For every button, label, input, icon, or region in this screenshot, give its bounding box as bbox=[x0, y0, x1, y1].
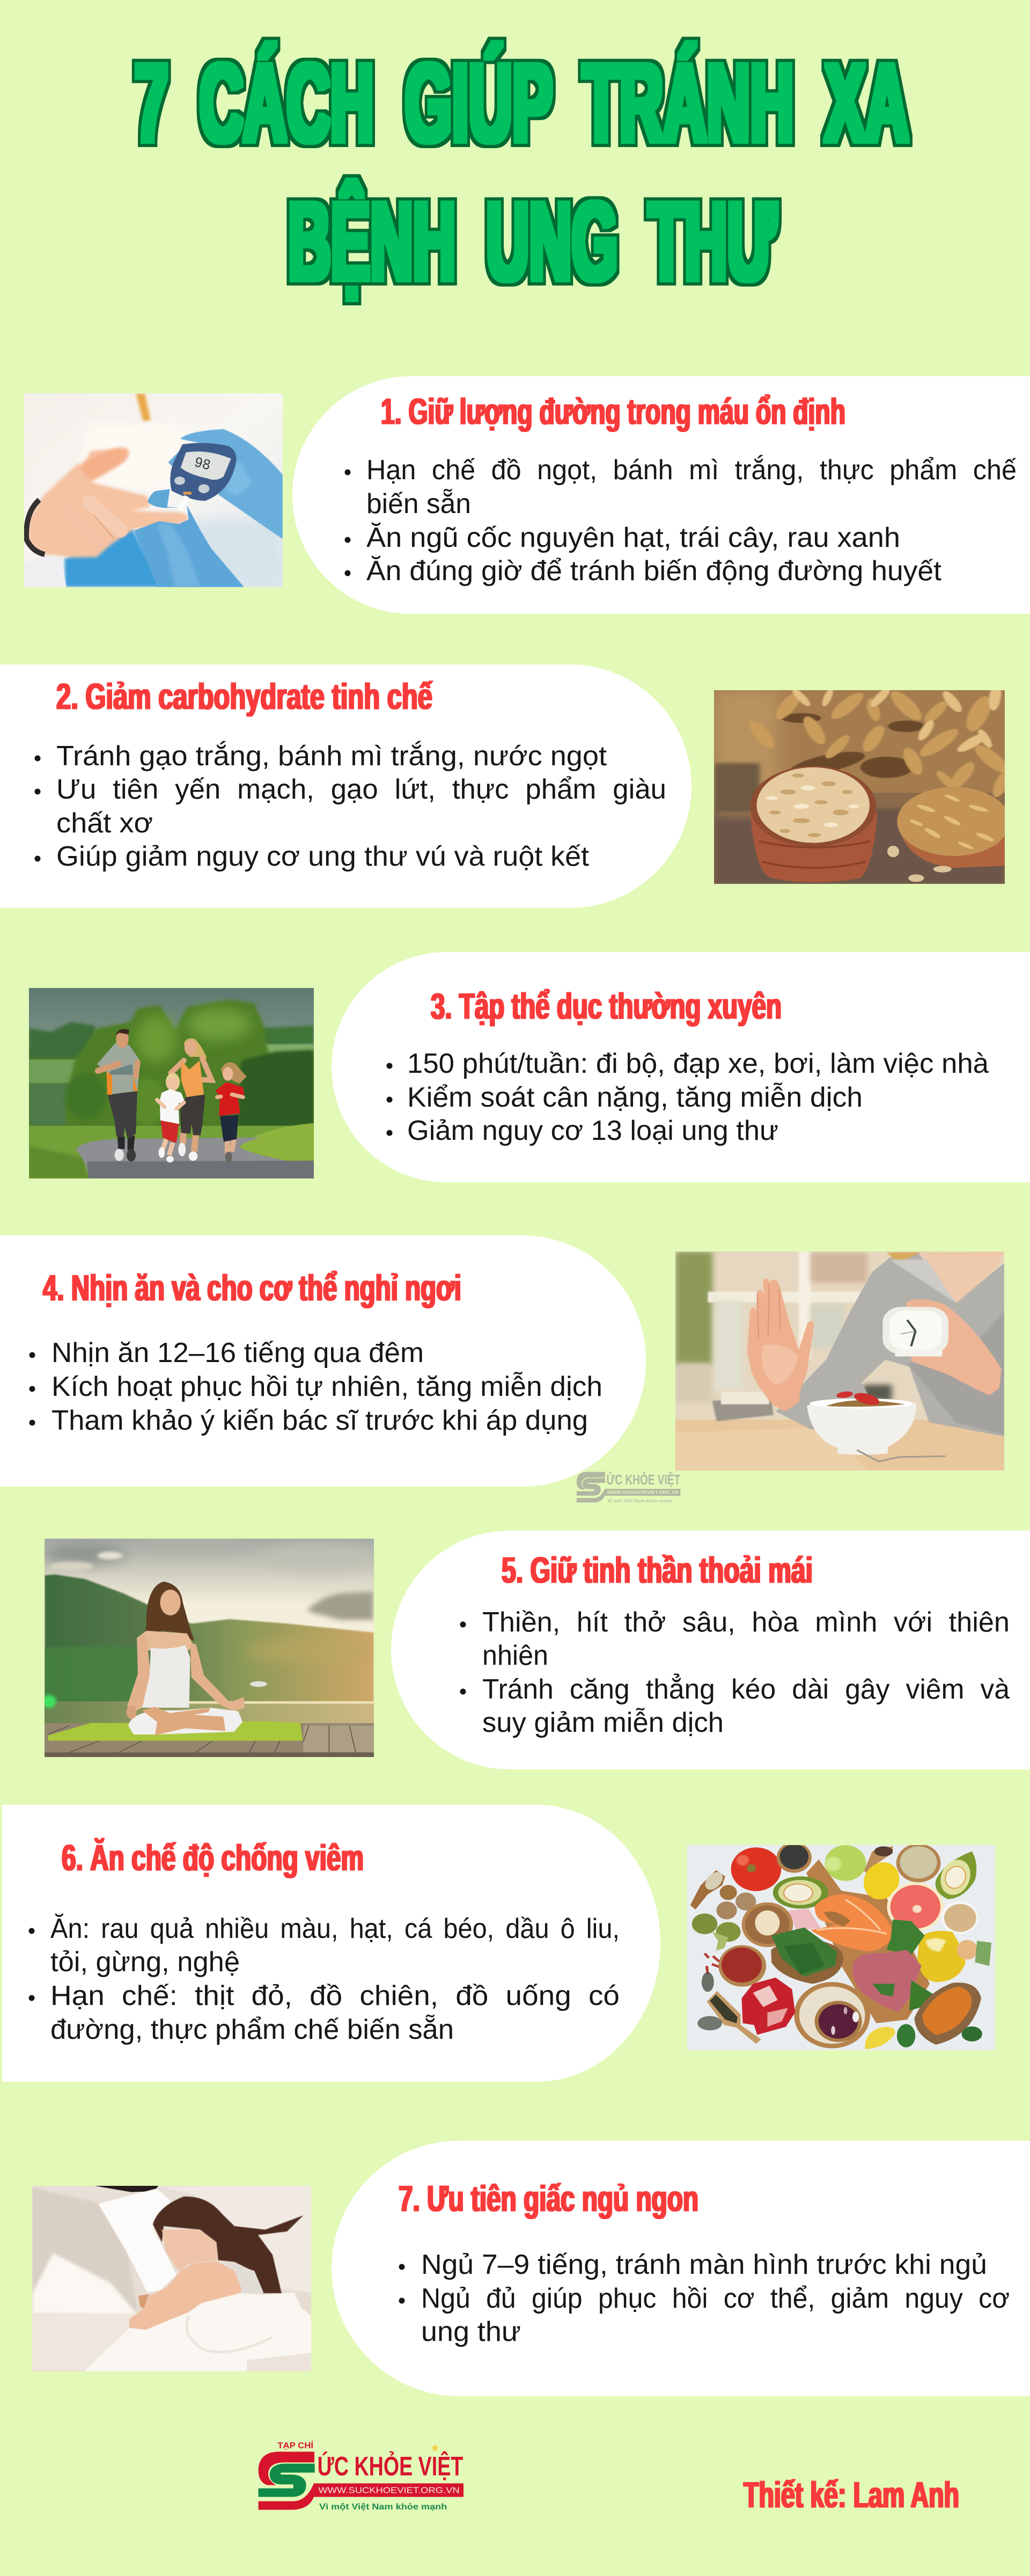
avocado center bbox=[773, 1876, 828, 1908]
card 3 bbox=[332, 952, 1030, 1182]
bullet list 4: Kích hoạt phục hồi tự nhiên, tăng miễn dịch bbox=[52, 1371, 602, 1402]
beef bbox=[852, 1950, 922, 2011]
oats bowl bbox=[794, 1982, 870, 2048]
bullet list 1: biến sẵn bbox=[366, 488, 471, 519]
bullet list 7: Ngủ 7–9 tiếng, tránh màn hình trước khi ngủ bbox=[421, 2249, 987, 2280]
raised hand bbox=[747, 1278, 814, 1411]
upper glove bbox=[180, 429, 283, 539]
card 5 bbox=[391, 1531, 1030, 1769]
watermark logo: WWW.SUCKHOEVIET.ORG.VN bbox=[607, 1490, 679, 1495]
walnuts bbox=[720, 1885, 737, 1900]
photo: healthy food flat lay bbox=[687, 1845, 995, 2050]
ham slice bbox=[789, 1908, 821, 1930]
bullet list 4: Nhịn ăn 12–16 tiếng qua đêm bbox=[52, 1337, 424, 1368]
bullet list 6: Ăn: rau quả nhiều màu, hạt, cá béo, dầu ô liu, bbox=[50, 1913, 620, 1944]
watermark logo bbox=[576, 1472, 680, 1503]
footer logo: Sức Khỏe Việt: TẠP CHÍ bbox=[277, 2441, 314, 2450]
photo: glucose meter: 98 bbox=[193, 455, 212, 474]
bullet list 2: Tránh gạo trắng, bánh mì trắng, nước ngọt bbox=[56, 741, 607, 772]
photo: woman meditating bbox=[45, 1539, 374, 1757]
heading 6: 6. Ăn chế độ chống viêm bbox=[62, 1838, 364, 1878]
bullet list 3: Giảm nguy cơ 13 loại ung thư bbox=[407, 1115, 778, 1146]
bullet list 5: suy giảm miễn dịch bbox=[482, 1707, 724, 1738]
bullet list 5 bbox=[460, 1607, 1010, 1738]
bullet list 5: nhiên bbox=[482, 1640, 548, 1671]
photo: glucose meter bbox=[24, 393, 283, 587]
sweater bbox=[776, 1253, 1004, 1437]
grapefruit bbox=[887, 1882, 944, 1931]
bullet list 7: ung thư bbox=[421, 2316, 521, 2347]
heading 3: 3. Tập thể dục thường xuyên bbox=[431, 986, 782, 1027]
heading 4: 4. Nhịn ăn và cho cơ thể nghỉ ngơi bbox=[43, 1268, 461, 1308]
lower glove bbox=[148, 489, 179, 508]
title bbox=[135, 41, 909, 303]
bullet list 1: Ăn đúng giờ để tránh biến động đường huyết bbox=[366, 555, 942, 587]
hand bbox=[28, 447, 188, 558]
section 4: fasting bbox=[0, 1235, 1004, 1503]
section 5: relaxed mind bbox=[42, 1531, 1030, 1769]
oil bottle bbox=[917, 1931, 966, 1982]
man bbox=[117, 1136, 135, 1150]
bullet list 6: tỏi, gừng, nghệ bbox=[50, 1946, 240, 1978]
bullet list 4: Tham khảo ý kiến bác sĩ trước khi áp dụng bbox=[52, 1405, 588, 1436]
lemon wedge and spinach bbox=[865, 2027, 895, 2049]
bullet list 6: đường, thực phẩm chế biến sẵn bbox=[50, 2014, 454, 2045]
card 4 bbox=[0, 1235, 646, 1487]
section 1: blood sugar bbox=[24, 376, 1030, 614]
bullet list 3: 150 phút/tuần: đi bộ, đạp xe, bơi, làm việc nhà bbox=[407, 1048, 989, 1079]
quinoa bowl bbox=[896, 1843, 940, 1882]
bullet list 2 bbox=[34, 741, 666, 872]
heading 5: 5. Giữ tinh thần thoải mái bbox=[502, 1550, 813, 1591]
broccoli bbox=[692, 1913, 717, 1934]
bullet list 6: Hạn chế: thịt đỏ, đồ chiên, đồ uống có bbox=[50, 1980, 620, 2011]
nuts bowl bbox=[742, 1902, 793, 1947]
bullet list 2: Ưu tiên yến mạch, gạo lứt, thực phẩm giàu bbox=[56, 774, 666, 805]
lentils bowl bbox=[914, 1982, 981, 2045]
woman bbox=[184, 1038, 207, 1059]
road bbox=[76, 1137, 314, 1179]
meter bbox=[170, 443, 237, 501]
bullet list 1: Hạn chế đồ ngọt, bánh mì trắng, thực phẩm chế bbox=[366, 455, 1017, 486]
card 6 bbox=[2, 1805, 660, 2082]
heading 2: 2. Giảm carbohydrate tinh chế bbox=[56, 676, 432, 717]
footer logo: Sức Khỏe Việt bbox=[259, 2441, 464, 2512]
woman bbox=[144, 1582, 195, 1647]
bullet list 3 bbox=[386, 1048, 989, 1146]
bullet list 1 bbox=[344, 455, 1017, 587]
photo: family jogging bbox=[29, 988, 314, 1179]
scoop top bbox=[864, 1846, 893, 1875]
lemon bbox=[859, 1859, 904, 1903]
chickpeas bbox=[940, 1901, 979, 1934]
tea scoop bbox=[707, 1991, 761, 2044]
photo: hand refusing food, clock bbox=[675, 1252, 1004, 1470]
bullet list 4 bbox=[29, 1337, 602, 1436]
spinach bowl bbox=[771, 1941, 843, 1984]
hand holding clock bbox=[906, 1299, 1002, 1395]
photo: oats in wooden bowls bbox=[714, 690, 1005, 884]
chia bowl bbox=[777, 1842, 812, 1873]
watermark logo: Vì một Việt Nam khỏe mạnh bbox=[607, 1498, 672, 1503]
card 1 bbox=[292, 376, 1030, 614]
heading 7: 7. Ưu tiên giấc ngủ ngon bbox=[399, 2178, 698, 2219]
clock bbox=[882, 1307, 948, 1355]
card 2 bbox=[0, 664, 691, 908]
bullet list 7: Ngủ đủ giúp phục hồi cơ thể, giảm nguy cơ bbox=[421, 2283, 1010, 2314]
section 2: refined carbs bbox=[0, 664, 1014, 908]
parsley bbox=[887, 1919, 925, 1955]
girl blonde bbox=[166, 1073, 180, 1091]
section 7: good sleep bbox=[32, 2141, 1030, 2396]
goji bowl bbox=[718, 1945, 766, 1987]
pomegranate bbox=[742, 1978, 795, 2035]
bullet list 6 bbox=[29, 1913, 620, 2045]
bullet list 3: Kiểm soát cân nặng, tăng miễn dịch bbox=[407, 1082, 863, 1113]
bullet list 5: Tránh căng thẳng kéo dài gây viêm và bbox=[482, 1673, 1010, 1705]
photo: woman sleeping bbox=[32, 2186, 311, 2372]
bullet list 1: Ăn ngũ cốc nguyên hạt, trái cây, rau xanh bbox=[366, 522, 900, 553]
section 6: anti-inflammatory diet bbox=[2, 1805, 995, 2082]
deck bbox=[45, 1723, 374, 1757]
footer logo: Sức Khỏe Việt: WWW.SUCKHOEVIET.ORG.VN bbox=[318, 2486, 460, 2496]
tomato bbox=[731, 1847, 781, 1891]
bullet list 7 bbox=[399, 2249, 1010, 2347]
footer logo: Sức Khỏe Việt: Vì một Việt Nam khỏe mạnh bbox=[319, 2502, 447, 2512]
card 7 bbox=[332, 2141, 1030, 2396]
spoon bbox=[857, 1450, 946, 1461]
mat bbox=[48, 1721, 303, 1741]
section 3: exercise bbox=[29, 952, 1030, 1182]
scoop left bbox=[690, 1870, 725, 1909]
salmon bbox=[811, 1894, 893, 1952]
board bbox=[806, 1860, 930, 2023]
bullet list 5: Thiền, hít thở sâu, hòa mình với thiên bbox=[482, 1607, 1010, 1638]
bowl bbox=[807, 1400, 916, 1455]
avocado right bbox=[936, 1851, 976, 1899]
girl red bbox=[221, 1062, 247, 1084]
bullet list 2: chất xơ bbox=[56, 808, 153, 839]
apple bbox=[825, 1845, 866, 1881]
bullet list 2: Giúp giảm nguy cơ ung thư vú và ruột kết bbox=[56, 841, 590, 872]
